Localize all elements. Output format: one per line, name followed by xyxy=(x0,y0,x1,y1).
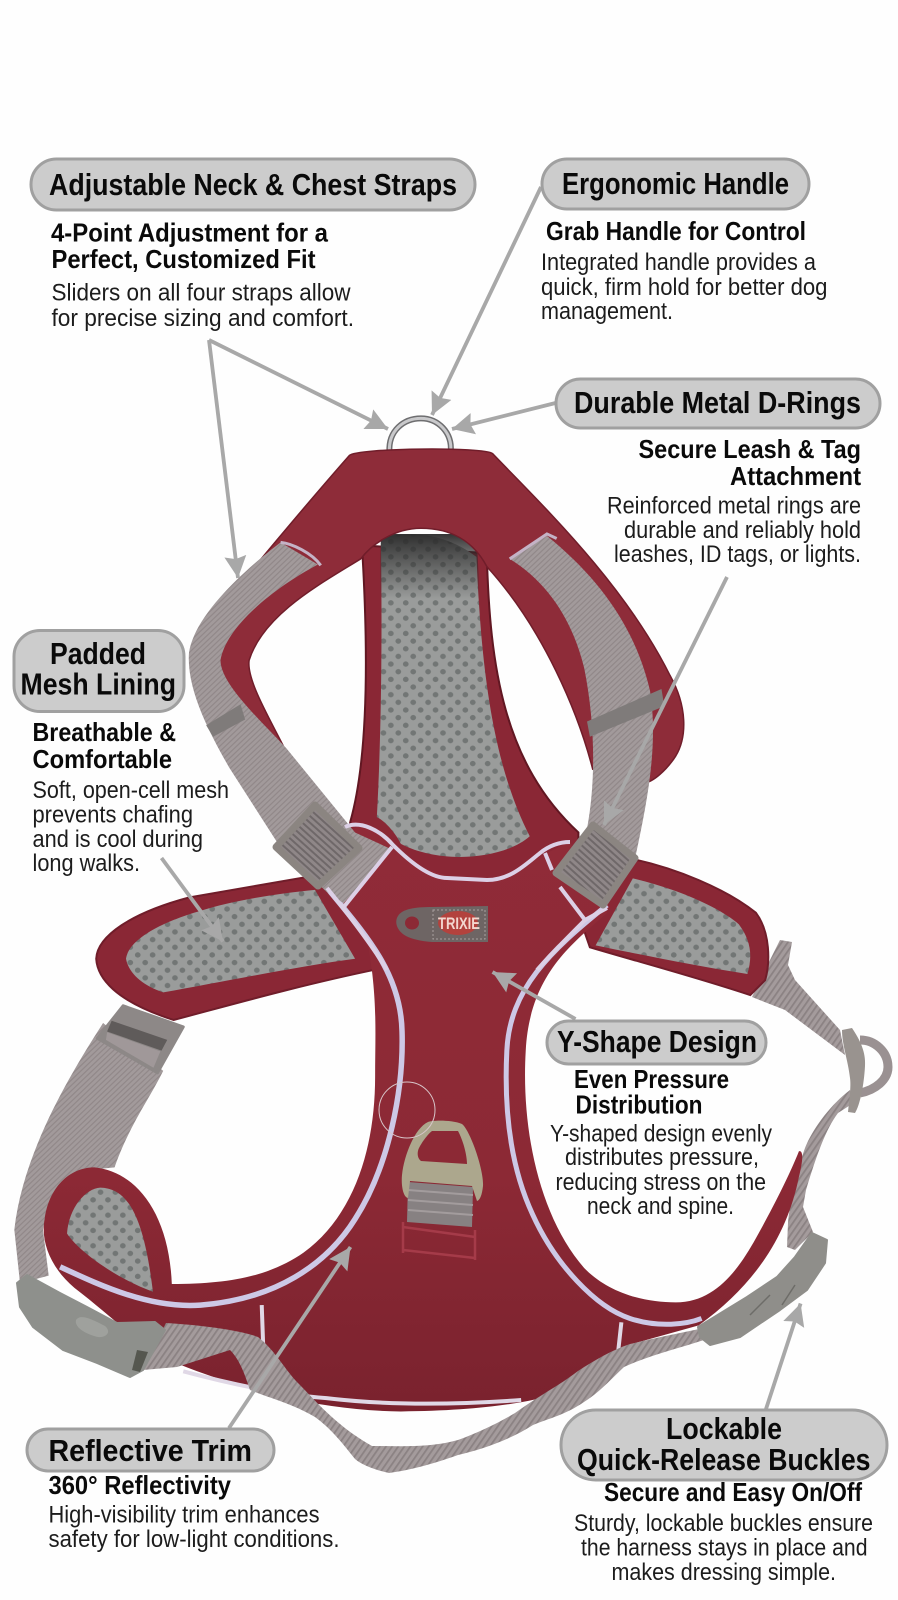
body text xyxy=(541,249,828,325)
lower left strap xyxy=(14,1023,163,1283)
body text: long walks. xyxy=(32,850,140,877)
arrow: Y-shape xyxy=(492,972,576,1019)
body text: High-visibility trim enhances xyxy=(48,1502,320,1528)
right shoulder slider xyxy=(556,825,635,905)
heading pill xyxy=(556,379,880,428)
metal handle ring xyxy=(402,1121,483,1260)
right quick-release buckle xyxy=(698,1233,827,1345)
body text xyxy=(32,777,229,877)
arrow: D-rings top xyxy=(452,403,556,429)
arrow: D-rings slider xyxy=(604,577,727,825)
thin loop xyxy=(379,1082,435,1138)
subheading: Breathable & xyxy=(32,717,176,747)
subheading xyxy=(32,717,176,774)
left shoulder slider xyxy=(276,805,359,886)
right shoulder strap xyxy=(510,534,664,855)
arrow: buckles xyxy=(766,1304,801,1409)
body text: distributes pressure, xyxy=(565,1144,759,1171)
left quick-release buckle xyxy=(17,1275,165,1377)
arrow: ergonomic handle xyxy=(432,187,541,415)
body text: makes dressing simple. xyxy=(612,1559,836,1586)
body text: Reinforced metal rings are xyxy=(607,492,861,520)
panel: padded mesh lining xyxy=(14,630,229,877)
body text: neck and spine. xyxy=(587,1193,734,1220)
spine panel xyxy=(338,545,578,898)
mesh shadow xyxy=(380,534,480,599)
panel: Y-shape design xyxy=(547,1021,772,1220)
heading pill: Reflective Trim xyxy=(48,1433,252,1468)
body xyxy=(44,826,802,1411)
body text: quick, firm hold for better dog xyxy=(541,274,828,301)
subheading: Comfortable xyxy=(32,744,172,774)
subheading: 4-Point Adjustment for a xyxy=(51,218,328,248)
heading pill: Mesh Lining xyxy=(20,666,176,702)
D-ring top xyxy=(389,418,451,452)
body text: prevents chafing xyxy=(32,802,193,828)
panel: durable D-rings xyxy=(556,379,880,568)
harness fabric xyxy=(14,418,802,1411)
body text: management. xyxy=(541,298,673,325)
heading pill xyxy=(542,159,809,209)
body text: Integrated handle provides a xyxy=(541,249,817,276)
subheading: Secure Leash & Tag xyxy=(638,434,861,464)
panel: ergonomic handle xyxy=(541,159,828,325)
heading pill: Lockable xyxy=(666,1411,782,1446)
arrow: mesh lining xyxy=(162,858,223,942)
subheading: 360° Reflectivity xyxy=(48,1470,231,1500)
right side strap and loop xyxy=(752,940,888,1250)
arrow: reflective trim xyxy=(229,1247,350,1428)
body text: safety for low-light conditions. xyxy=(48,1526,340,1553)
heading pill: Y-Shape Design xyxy=(557,1024,757,1059)
subheading xyxy=(638,434,861,491)
body text xyxy=(48,1502,340,1553)
arrow: adjustable straps xyxy=(209,340,388,578)
body text: and is cool during xyxy=(32,826,203,853)
brand tag xyxy=(396,906,488,942)
body text xyxy=(550,1120,772,1220)
spine mesh xyxy=(377,534,530,857)
heading pill xyxy=(561,1410,887,1480)
left shoulder strap xyxy=(189,542,392,903)
body text: Soft, open-cell mesh xyxy=(32,777,229,804)
body text xyxy=(574,1510,873,1586)
body text: the harness stays in place and xyxy=(581,1534,868,1562)
body text: durable and reliably hold xyxy=(624,517,861,544)
body text xyxy=(52,280,354,332)
neck reflective trim xyxy=(327,825,607,970)
bottom webbing strap xyxy=(143,1323,704,1473)
panel: adjustable straps xyxy=(31,159,475,332)
panel: reflective trim xyxy=(27,1429,340,1553)
left chest wing xyxy=(96,875,378,1020)
subheading: Even Pressure xyxy=(574,1064,729,1094)
subheading: Attachment xyxy=(730,461,861,491)
heading pill xyxy=(31,159,475,210)
subheading: Grab Handle for Control xyxy=(546,216,806,246)
body text: for precise sizing and comfort. xyxy=(52,305,354,332)
subheading: Secure and Easy On/Off xyxy=(604,1477,862,1507)
heading pill xyxy=(14,630,184,712)
subheading xyxy=(574,1064,729,1120)
subheading: Distribution xyxy=(576,1090,702,1120)
reflective trim xyxy=(60,890,702,1404)
heading pill: Durable Metal D-Rings xyxy=(574,385,861,420)
brand tag: TRIXIE xyxy=(438,914,480,933)
heading pill: Adjustable Neck & Chest Straps xyxy=(49,167,457,202)
lower left slider xyxy=(97,1006,183,1073)
yoke xyxy=(200,449,684,783)
body text: reducing stress on the xyxy=(556,1169,766,1196)
body text: leashes, ID tags, or lights. xyxy=(614,541,861,568)
body text: Y-shaped design evenly xyxy=(550,1120,772,1148)
right chest wing xyxy=(573,857,768,995)
body text xyxy=(607,492,861,568)
heading pill: Padded xyxy=(50,636,146,671)
loop mesh xyxy=(67,1188,153,1292)
body text: Sliders on all four straps allow xyxy=(52,280,351,306)
panel: quick-release buckles xyxy=(561,1410,887,1586)
subheading: Perfect, Customized Fit xyxy=(52,244,316,274)
subheading xyxy=(51,218,328,274)
heading pill: Ergonomic Handle xyxy=(562,166,789,201)
